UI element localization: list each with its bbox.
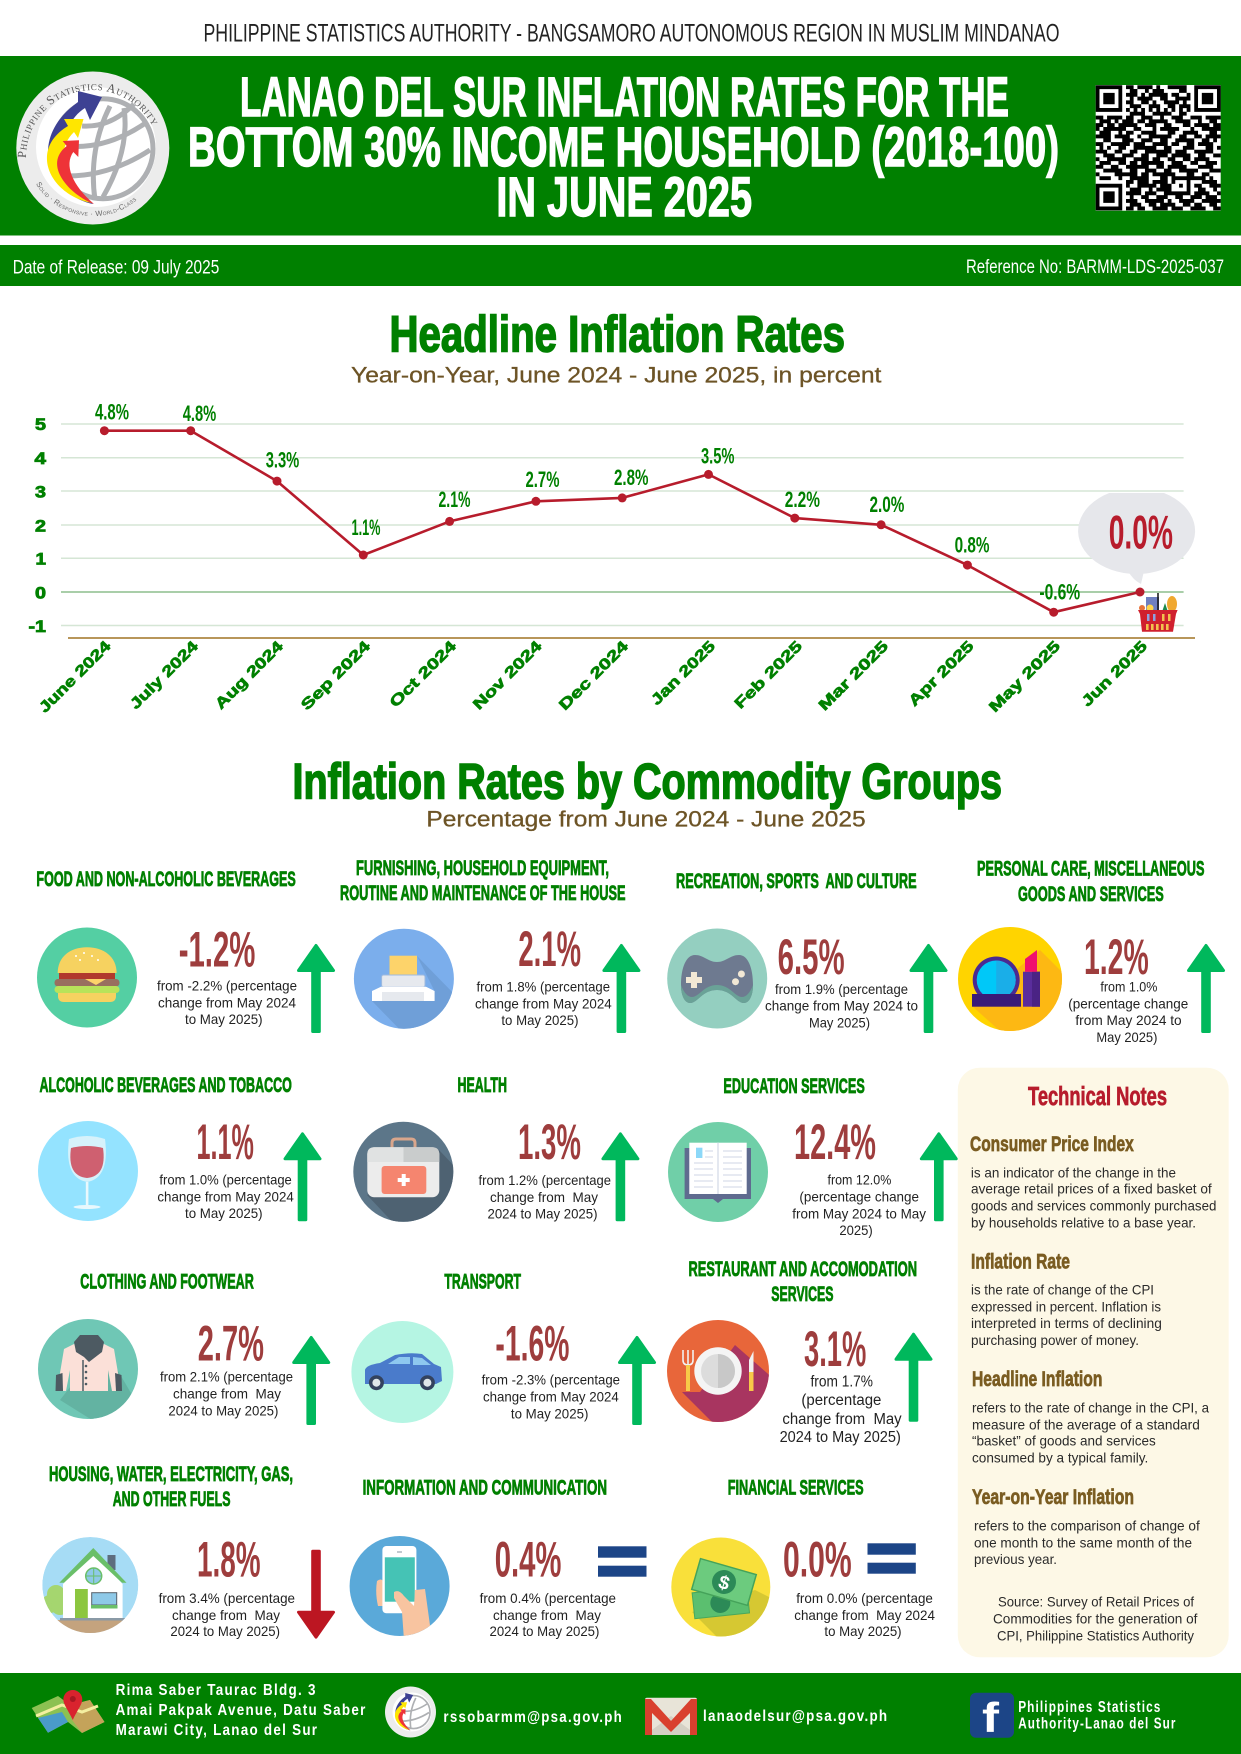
rate: 1.1% (196, 1114, 254, 1170)
change note: May 2025) (809, 1015, 870, 1031)
icon: printer (354, 928, 454, 1029)
data line (100, 426, 1144, 617)
heading: Technical Notes (1028, 1083, 1167, 1111)
change note (475, 979, 612, 1028)
change note: (percentage change (799, 1189, 919, 1205)
change note: (percentage change (1068, 996, 1188, 1012)
heading (688, 1258, 917, 1306)
change note (480, 1590, 616, 1639)
panel: information and communication (350, 1476, 646, 1640)
rate: 1.8% (197, 1532, 261, 1588)
x axis labels: Sep 2024 (298, 637, 374, 714)
heading: RECREATION, SPORTS AND CULTURE (676, 870, 917, 893)
release bar (0, 245, 1241, 286)
panel: technical notes (958, 1068, 1229, 1657)
change note (482, 1372, 620, 1422)
arrow up (294, 1338, 329, 1424)
x axis labels: Aug 2024 (212, 637, 287, 713)
change note: change from May (490, 1189, 598, 1205)
heading: HOUSING, WATER, ELECTRICITY, GAS, (49, 1463, 293, 1486)
note: headline inflation (972, 1368, 1209, 1466)
change note: change from May 2024 (158, 995, 296, 1011)
icon: book (668, 1122, 768, 1222)
change note: change from May (493, 1607, 601, 1623)
icon: plate and cutlery (667, 1320, 769, 1422)
icon: facebook: f (982, 1694, 1000, 1741)
panel: recreation (667, 870, 946, 1032)
x axis labels: Jan 2025 (648, 638, 719, 709)
data labels: 3.3% (266, 448, 299, 472)
panel: restaurant and accommodation (667, 1258, 931, 1446)
facebook page name: Philippines Statistics (1018, 1699, 1162, 1716)
panel: alcoholic beverages (38, 1074, 320, 1221)
address (116, 1682, 367, 1739)
change note (1068, 979, 1188, 1045)
icon: money (671, 1538, 775, 1640)
icon: small PSA logo (385, 1686, 436, 1738)
source note: Source: Survey of Retail Prices of (998, 1594, 1194, 1610)
change note: change from May 2024 (794, 1607, 935, 1623)
change note: to May 2025) (511, 1406, 588, 1422)
change note: from -2.3% (percentage (482, 1372, 620, 1388)
facebook page name: Authority-Lanao del Sur (1018, 1716, 1176, 1733)
data labels: 2.8% (614, 465, 648, 490)
change note: change from May (173, 1386, 281, 1402)
change note: to May 2025) (501, 1012, 578, 1028)
panel: clothing and footwear (38, 1271, 329, 1425)
note: headline inflation: consumed by a typical family. (972, 1450, 1148, 1466)
icon: map pin (32, 1690, 105, 1733)
icon: PSA logo: Philippine Statistics Authority (18, 84, 158, 158)
change note: to May 2025) (185, 1011, 263, 1027)
data labels: 4.8% (183, 401, 216, 426)
icon: jacket (38, 1319, 138, 1425)
note: inflation rate: purchasing power of money. (971, 1332, 1139, 1348)
heading (49, 1463, 293, 1511)
change note: from -2.2% (percentage (157, 978, 297, 994)
address: Amai Pakpak Avenue, Datu Saber (116, 1702, 367, 1719)
y axis labels: -1 (28, 618, 46, 636)
note: inflation rate (971, 1251, 1162, 1348)
icon: first aid kit (353, 1122, 454, 1222)
heading: ALCOHOLIC BEVERAGES AND TOBACCO (40, 1074, 292, 1097)
change note: 2024 to May 2025) (170, 1623, 280, 1639)
note: year-on-year inflation: previous year. (974, 1551, 1057, 1567)
icon: facebook (970, 1693, 1014, 1741)
note: inflation rate: expressed in percent. Inflation is (971, 1299, 1161, 1315)
equals sign (868, 1543, 916, 1574)
data labels: 2.0% (870, 492, 904, 517)
change note (794, 1590, 935, 1639)
address: Rima Saber Taurac Bldg. 3 (116, 1682, 317, 1699)
y axis labels: 0 (35, 584, 46, 602)
heading (977, 858, 1204, 906)
subheading: commodity groups: Percentage from June 2024 - June 2025 (426, 807, 866, 832)
email: regional: rssobarmm@psa.gov.ph (443, 1709, 623, 1726)
change note (792, 1172, 926, 1238)
heading: headline inflation: Headline Inflation Rates (390, 306, 845, 363)
heading: FINANCIAL SERVICES (728, 1476, 864, 1499)
rate: 1.3% (518, 1114, 581, 1170)
arrow up (911, 946, 946, 1032)
heading: CLOTHING AND FOOTWEAR (80, 1271, 254, 1294)
change note: from May 2024 to (1075, 1012, 1182, 1028)
change note (160, 1369, 293, 1419)
equals sign (598, 1546, 646, 1577)
rate: -1.2% (179, 922, 255, 978)
icon: car (351, 1321, 453, 1423)
note: consumer price index: Consumer Price Index (970, 1133, 1134, 1156)
arrow up (620, 1338, 654, 1424)
release date: Date of Release: 09 July 2025 (13, 257, 219, 278)
y axis labels: 1 (36, 550, 46, 568)
note: consumer price index (970, 1133, 1216, 1231)
data labels: 4.8% (95, 399, 129, 424)
icon: cosmetics (958, 927, 1062, 1031)
icon: PSA logo: Solid · Responsive · World-Class (36, 182, 136, 216)
heading: commodity groups: Inflation Rates by Commodity Groups (292, 753, 1002, 809)
rate: 3.1% (804, 1321, 866, 1377)
QR code (1096, 85, 1221, 211)
x axis labels: Feb 2025 (731, 638, 806, 712)
change note: change from May (782, 1411, 902, 1428)
heading: FOOD AND NON-ALCOHOLIC BEVERAGES (36, 868, 296, 891)
note: year-on-year inflation: refers to the comparison of change of (974, 1518, 1200, 1534)
note: headline inflation: refers to the rate of change in the CPI, a (972, 1400, 1209, 1416)
note: consumer price index: is an indicator of the change in the (971, 1165, 1176, 1181)
callout bubble (1078, 493, 1195, 584)
source note: Commodities for the generation of (993, 1611, 1198, 1627)
change note (478, 1172, 611, 1222)
panel: financial services (671, 1476, 935, 1640)
y axis labels: 4 (34, 450, 47, 468)
x axis labels: May 2025 (986, 638, 1064, 716)
arrow up (604, 946, 639, 1032)
footer (0, 1673, 1241, 1754)
change note: from May 2024 to May (792, 1206, 926, 1222)
change note (159, 1590, 295, 1639)
change note: change from May (172, 1607, 280, 1623)
facebook page name (1018, 1699, 1176, 1733)
note: inflation rate: is the rate of change of the CPI (971, 1282, 1154, 1298)
arrow up (921, 1134, 956, 1220)
change note: from 1.7% (810, 1374, 873, 1391)
arrow up (603, 1134, 638, 1220)
change note: from 1.0% (1100, 979, 1157, 995)
y axis labels: 5 (35, 416, 46, 434)
note: headline inflation: Headline Inflation (972, 1368, 1102, 1391)
heading: SERVICES (771, 1283, 834, 1306)
panel: furnishing (340, 857, 639, 1040)
heading: HEALTH (458, 1074, 507, 1097)
heading: FURNISHING, HOUSEHOLD EQUIPMENT, (356, 857, 609, 880)
note: consumer price index: by households relative to a base year. (971, 1215, 1196, 1231)
change note: from 1.2% (percentage (478, 1172, 611, 1188)
source note: CPI, Philippine Statistics Authority (997, 1628, 1194, 1644)
x axis labels: Jun 2025 (1078, 638, 1151, 710)
y axis labels: 3 (35, 484, 46, 502)
data labels: -0.6% (1039, 580, 1080, 605)
change note: change from May 2024 (483, 1389, 619, 1405)
data labels: 0.8% (955, 533, 990, 558)
rate: 2.7% (198, 1316, 264, 1372)
note: year-on-year inflation: Year-on-Year Inflation (972, 1486, 1134, 1509)
note: consumer price index: average retail prices of a fixed basket of (971, 1181, 1212, 1197)
change note: 2024 to May 2025) (490, 1623, 599, 1639)
panel: personal care (958, 858, 1224, 1045)
note: consumer price index: goods and services commonly purchased (971, 1198, 1216, 1214)
change note: 2024 to May 2025) (168, 1403, 278, 1419)
change note: from 2.1% (percentage (160, 1369, 293, 1385)
change note (157, 978, 297, 1027)
rate: -1.6% (495, 1316, 569, 1372)
note: headline inflation: measure of the average of a standard (972, 1417, 1200, 1433)
change note: from 1.9% (percentage (775, 981, 908, 997)
data labels: 1.1% (352, 515, 380, 540)
rate: 0.0% (783, 1532, 852, 1588)
icon: PSA logo (16, 72, 170, 224)
change note: to May 2025) (824, 1623, 902, 1639)
change note: from 0.4% (percentage (480, 1590, 616, 1606)
icon: burger (37, 928, 137, 1028)
change note: from 1.0% (percentage (159, 1172, 292, 1188)
email: provincial: lanaodelsur@psa.gov.ph (703, 1708, 888, 1725)
change note (780, 1374, 902, 1446)
data labels: 2.7% (526, 467, 560, 492)
arrow up (896, 1334, 931, 1420)
title (188, 65, 1059, 228)
change note: May 2025) (1096, 1029, 1157, 1045)
change note: 2024 to May 2025) (780, 1429, 901, 1446)
heading: EDUCATION SERVICES (723, 1075, 865, 1098)
x axis labels: Nov 2024 (470, 637, 546, 713)
callout value: 0.0% (1109, 506, 1173, 559)
heading (340, 857, 626, 905)
panel: transport (351, 1271, 654, 1424)
change note (157, 1172, 294, 1221)
icon: money: $ (716, 1572, 732, 1595)
data labels: 2.1% (438, 487, 470, 512)
y axis labels: 2 (35, 518, 46, 536)
change note: to May 2025) (185, 1205, 263, 1221)
change note: change from May 2024 (157, 1189, 294, 1205)
heading: ROUTINE AND MAINTENANCE OF THE HOUSE (340, 882, 626, 905)
title: IN JUNE 2025 (496, 165, 752, 228)
data labels: 3.5% (701, 444, 734, 469)
data labels (95, 399, 1080, 605)
change note: change from May 2024 (475, 996, 612, 1012)
change note: 2025) (839, 1222, 873, 1238)
change note: from 1.8% (percentage (476, 979, 610, 995)
change note: from 3.4% (percentage (159, 1590, 295, 1606)
x axis labels: Oct 2024 (387, 637, 460, 711)
x axis labels: Dec 2024 (556, 637, 632, 714)
note: year-on-year inflation: one month to the same month of the (974, 1535, 1192, 1551)
arrow up (1188, 946, 1224, 1032)
note: year-on-year inflation (972, 1486, 1200, 1567)
rate: 1.2% (1084, 929, 1149, 985)
rate: 6.5% (778, 929, 845, 985)
header banner (0, 56, 1241, 236)
rate: 0.4% (495, 1532, 562, 1588)
x axis labels: Apr 2025 (905, 638, 977, 710)
rate: 12.4% (794, 1114, 876, 1170)
line chart: headline inflation (28, 399, 1195, 716)
change note: change from May 2024 to (765, 998, 918, 1014)
panel: food and non-alcoholic beverages (36, 868, 334, 1032)
icon: game controller (667, 928, 767, 1028)
heading: INFORMATION AND COMMUNICATION (363, 1476, 607, 1499)
heading: AND OTHER FUELS (113, 1488, 230, 1511)
arrow up (285, 1134, 320, 1220)
panel: education (668, 1075, 956, 1238)
icon: smartphone (350, 1536, 450, 1640)
panel: housing and utilities (38, 1463, 334, 1640)
change note: from 0.0% (percentage (796, 1590, 933, 1606)
arrow up (298, 946, 334, 1032)
icon: wine glass (38, 1121, 138, 1221)
x axis labels: Mar 2025 (815, 638, 892, 714)
change note: from 12.0% (828, 1172, 891, 1188)
panel: health (353, 1074, 638, 1230)
change note: (percentage (801, 1392, 881, 1409)
heading: RESTAURANT AND ACCOMODATION (688, 1258, 917, 1281)
source note (993, 1594, 1198, 1644)
change note (765, 981, 918, 1031)
x axis labels: July 2024 (127, 637, 202, 713)
address: Marawi City, Lanao del Sur (116, 1722, 318, 1739)
y axis labels (28, 416, 47, 636)
arrow down (298, 1551, 334, 1637)
rate: 2.1% (518, 921, 581, 977)
x axis labels: June 2024 (36, 637, 115, 716)
note: headline inflation: “basket” of goods and services (972, 1433, 1156, 1449)
icon: mail (645, 1698, 697, 1735)
icon: house (42, 1537, 138, 1633)
data labels: 2.2% (785, 487, 820, 512)
heading: TRANSPORT (444, 1271, 521, 1294)
note: inflation rate: interpreted in terms of declining (971, 1315, 1162, 1331)
note: inflation rate: Inflation Rate (971, 1251, 1070, 1274)
icon: shopping basket (1138, 593, 1178, 632)
subheading: headline inflation: Year-on-Year, June 2024 - June 2025, in percent (351, 363, 881, 388)
x axis labels (36, 637, 1151, 716)
change note: 2024 to May 2025) (488, 1206, 598, 1222)
